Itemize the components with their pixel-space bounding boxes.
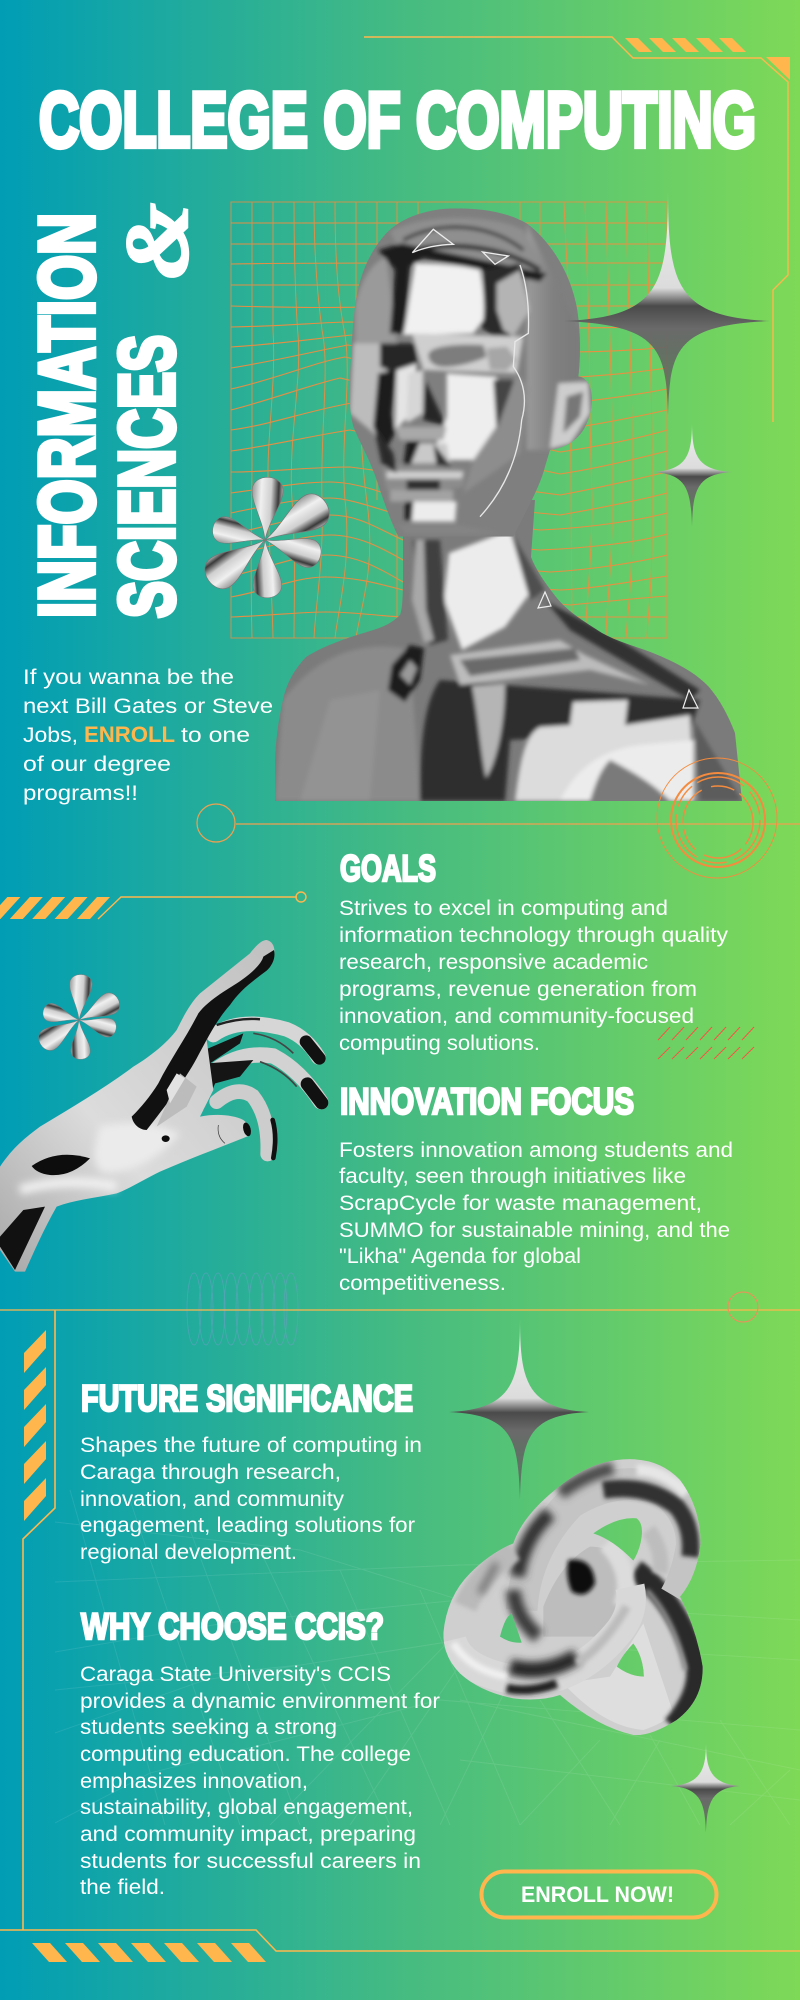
innovation text [339,1139,733,1295]
innovation text: ScrapCycle for waste management, [339,1192,702,1215]
future significance text: engagement, leading solutions for [80,1514,415,1537]
chrome bust torso [270,500,750,802]
enroll now button [482,1872,716,1918]
why choose text: computing education. The college [80,1743,411,1766]
future significance text: regional development. [80,1541,297,1564]
red hatch marks [658,1027,754,1059]
intro text [23,666,273,805]
why choose text: provides a dynamic environment for [80,1690,440,1713]
warped orange grid [231,202,667,638]
why choose text [80,1663,440,1899]
intro text: Jobs, [23,724,78,747]
chrome knot [437,1453,710,1740]
faint perspective grid [55,1490,800,1825]
future significance text: innovation, and community [80,1488,345,1511]
innovation text: Fosters innovation among students and [339,1139,733,1162]
chrome flower: upper [199,477,335,598]
innovation text: faculty, seen through initiatives like [339,1165,686,1188]
innovation text: "Likha" Agenda for global [339,1245,581,1268]
enroll now button: ENROLL NOW! [521,1882,674,1907]
why choose text: emphasizes innovation, [80,1770,308,1793]
goals text: innovation, and community-focused [339,1005,694,1028]
intro text: next Bill Gates or Steve [23,695,273,718]
heading: innovation focus: INNOVATION FOCUS [340,1081,634,1122]
intro text: If you wanna be the [23,666,234,689]
heading: future significance: FUTURE SIGNIFICANCE [81,1378,413,1419]
chrome head [347,205,600,538]
bottom hazard stripes [32,1943,266,1962]
top right frame decoration [364,37,790,422]
stripe bar with pointer line [0,892,306,919]
goals text: information technology through quality [339,924,729,947]
vertical heading: sciences: SCIENCES [102,335,190,618]
four point star: small under ear [653,422,732,527]
heading: goals: GOALS [340,848,436,889]
four point star: lower right [671,1742,740,1833]
goals text: research, responsive academic [339,951,648,974]
innovation text: SUMMO for sustainable mining, and the [339,1219,730,1242]
intro text: of our degree [23,753,171,776]
vertical heading: information: INFORMATION [22,213,110,618]
chrome hand [0,940,322,1272]
orange concentric target [657,758,777,878]
ampersand: & [108,203,207,279]
spring coil [187,1273,298,1345]
left side frame line [0,1310,800,1951]
divider with circles [197,804,800,842]
section divider [0,1292,800,1322]
why choose text: and community impact, preparing [80,1823,416,1846]
why choose text: students for successful careers in [80,1850,421,1873]
goals text: Strives to excel in computing and [339,897,668,920]
four point star: middle [449,1318,589,1500]
goals text: programs, revenue generation from [339,978,697,1001]
intro text: programs!! [23,782,138,805]
innovation text: competitiveness. [339,1272,506,1295]
chrome flower: lower [35,974,123,1060]
intro text: ENROLL [84,722,175,747]
future significance text: Shapes the future of computing in [80,1434,422,1457]
why choose text: the field. [80,1876,165,1899]
heading: why choose ccis: WHY CHOOSE CCIS? [81,1606,384,1647]
future significance text [80,1434,422,1564]
why choose text: sustainability, global engagement, [80,1796,413,1819]
left hazard stripes [24,1330,46,1521]
four point star: large top right [564,188,770,415]
goals text: computing solutions. [339,1032,540,1055]
intro text: to one [181,724,250,747]
why choose text: Caraga State University's CCIS [80,1663,391,1686]
future significance text: Caraga through research, [80,1461,341,1484]
why choose text: students seeking a strong [80,1716,337,1739]
goals text [339,897,729,1055]
